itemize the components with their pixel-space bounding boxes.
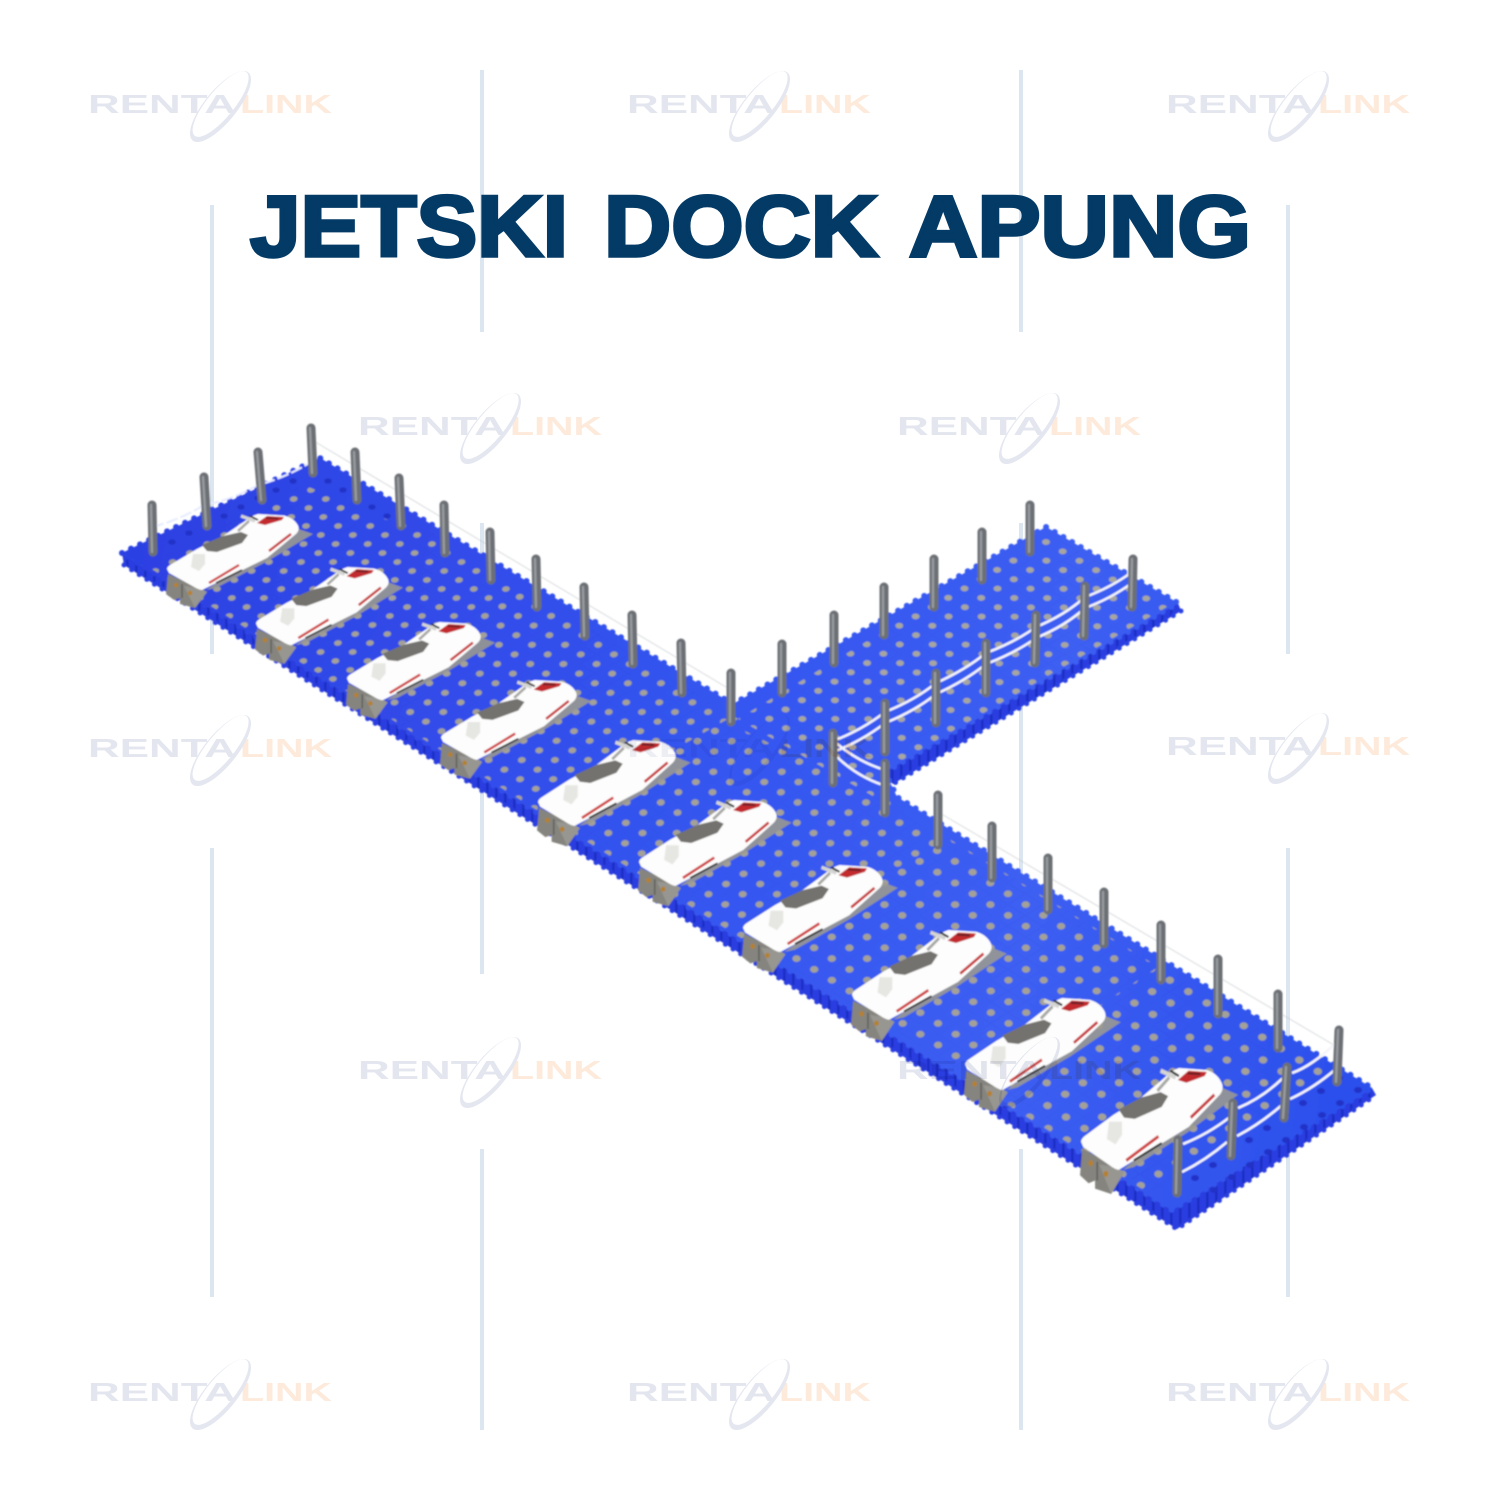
vertical guide lines — [210, 70, 1290, 1430]
watermark logo row 1 centre: RENTA — [627, 89, 775, 119]
jet ski 5 — [537, 740, 691, 846]
watermark logo row 5 left: RENTA — [88, 1377, 236, 1407]
watermark logo row 3 centre over dock: RENTA — [627, 733, 775, 763]
watermark logo row 1 right — [1166, 62, 1410, 151]
jet ski 6 — [638, 800, 792, 906]
dock side faces — [122, 553, 1376, 1229]
watermark logo row 1 right: LINK — [1318, 89, 1410, 119]
watermark logo row 5 centre — [627, 1350, 871, 1439]
jet ski 10 — [1080, 1068, 1238, 1194]
end ropes — [1182, 1042, 1337, 1172]
watermark logo row 4 right over dock: RENTA — [897, 1055, 1045, 1085]
watermark logo row 1 left: RENTA — [88, 89, 236, 119]
watermark logo row 5 centre: RENTA — [627, 1377, 775, 1407]
jet ski 3 — [346, 622, 495, 719]
jet ski 7 — [742, 865, 898, 973]
watermark logo row 5 right: LINK — [1318, 1377, 1410, 1407]
jet ski 8 — [851, 930, 1007, 1041]
floating dock illustration — [100, 420, 1400, 1250]
jet ski 9 — [964, 998, 1121, 1112]
mooring posts — [151, 428, 1339, 1193]
surface fill under scallops — [122, 458, 1372, 1210]
watermark logo row 3 centre over dock: LINK — [779, 733, 871, 763]
watermark logo row 3 right — [1166, 704, 1410, 793]
watermark logo row 5 left: LINK — [240, 1377, 332, 1407]
watermark logo row 3 left: RENTA — [88, 733, 236, 763]
title: DOCK — [604, 179, 878, 275]
watermark logo row 2 right: LINK — [1049, 411, 1141, 441]
tan studs on main dock — [152, 486, 1323, 1190]
white rope on outer end — [152, 462, 311, 527]
watermark logo row 5 right — [1166, 1350, 1410, 1439]
jet ski 1 — [166, 514, 313, 608]
watermark logo row 4 left: LINK — [510, 1055, 602, 1085]
watermark logo row 4 right over dock: LINK — [1049, 1055, 1141, 1085]
tan studs on branch dock — [733, 533, 1172, 807]
branch ropes — [833, 572, 1132, 785]
watermark logo row 1 centre — [627, 62, 871, 151]
watermark logo row 3 left — [88, 706, 332, 795]
dock top surface — [122, 458, 1372, 1210]
watermark logo row 2 right — [897, 384, 1141, 473]
watermark logo row 5 centre: LINK — [779, 1377, 871, 1407]
watermark logo row 3 centre over dock — [627, 706, 871, 795]
title: JETSKI — [250, 179, 568, 275]
watermark logo row 1 left: LINK — [240, 89, 332, 119]
dark blue studs at dock ends — [168, 478, 1362, 1193]
watermark logo row 1 right: RENTA — [1166, 89, 1314, 119]
watermark logo row 3 left: LINK — [240, 733, 332, 763]
jet ski 4 — [440, 680, 591, 779]
watermark logo row 3 right: RENTA — [1166, 731, 1314, 761]
watermark logo row 5 right: RENTA — [1166, 1377, 1314, 1407]
watermark logo row 1 centre: LINK — [779, 89, 871, 119]
jet ski 2 — [255, 567, 403, 664]
watermark logo row 2 left — [358, 384, 602, 473]
watermark logo row 2 left: LINK — [510, 411, 602, 441]
title — [250, 179, 1251, 275]
watermark logo row 5 left — [88, 1350, 332, 1439]
title: APUNG — [909, 179, 1251, 275]
watermark logo row 4 left: RENTA — [358, 1055, 506, 1085]
watermark logo row 1 left — [88, 62, 332, 151]
watermark logo row 3 right: LINK — [1318, 731, 1410, 761]
watermark logo row 4 left — [358, 1028, 602, 1117]
watermark logo row 2 right: RENTA — [897, 411, 1045, 441]
watermark logo row 4 right over dock — [897, 1028, 1141, 1117]
watermark logo row 2 left: RENTA — [358, 411, 506, 441]
thin guide ropes along upper edge — [312, 440, 1339, 1048]
